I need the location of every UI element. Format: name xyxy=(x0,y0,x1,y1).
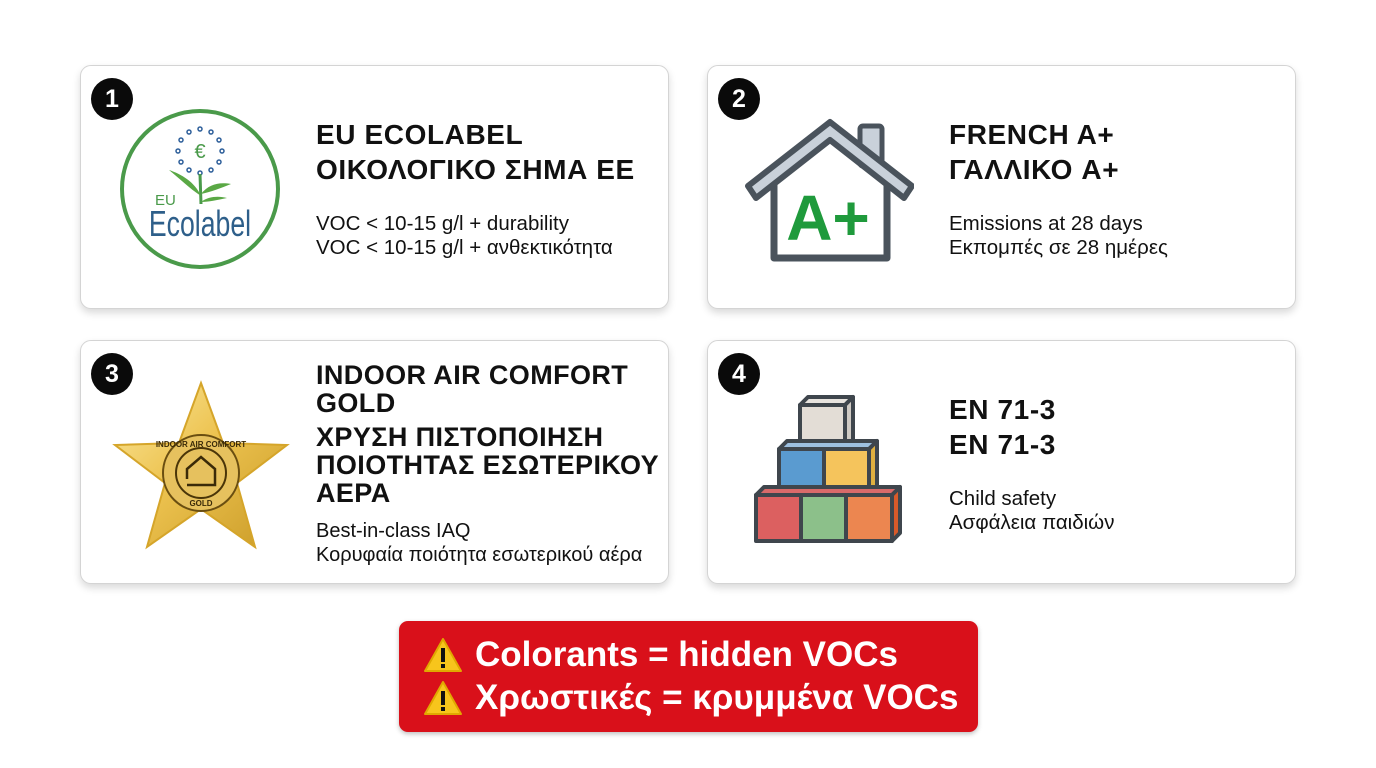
icon: warning xyxy=(424,638,462,672)
badge 4: 4 xyxy=(732,360,746,388)
panel: French A+ xyxy=(707,65,1296,309)
title: ΟΙΚΟΛΟΓΙΚΟ ΣΗΜΑ ΕΕ xyxy=(316,154,635,185)
body text: Ασφάλεια παιδιών xyxy=(949,511,1114,534)
badge 1 xyxy=(91,78,133,120)
body text xyxy=(316,520,642,566)
icon: EU Ecolabel logo: Ecolabel xyxy=(149,203,251,244)
body text: Κορυφαία ποιότητα εσωτερικού αέρα xyxy=(316,544,642,566)
body text xyxy=(316,212,613,259)
callout: colorants warning xyxy=(399,621,978,732)
body text: VOC < 10-15 g/l + ανθεκτικότητα xyxy=(316,236,613,259)
title: EU ECOLABEL xyxy=(316,119,523,150)
title: GOLD xyxy=(316,388,396,418)
icon: EU Ecolabel logo: EU xyxy=(155,192,176,209)
warning line 2: Χρωστικές = κρυμμένα VOCs xyxy=(475,678,958,717)
body text: VOC < 10-15 g/l + durability xyxy=(316,212,569,235)
title: ΓΑΛΛΙΚΟ A+ xyxy=(949,154,1119,185)
icon: gold star: INDOOR AIR COMFORT xyxy=(156,440,246,449)
badge 3 xyxy=(91,353,133,395)
title: FRENCH A+ xyxy=(949,119,1114,150)
title xyxy=(949,119,1119,185)
badge 2: 2 xyxy=(732,85,746,113)
body text: Εκπομπές σε 28 ημέρες xyxy=(949,236,1168,259)
icon: EU Ecolabel logo: € xyxy=(194,141,206,163)
title: ΠΟΙΟΤΗΤΑΣ ΕΣΩΤΕΡΙΚΟΥ xyxy=(316,450,659,480)
badge 2 xyxy=(718,78,760,120)
icon: warning xyxy=(424,681,462,715)
panel: EU Ecolabel xyxy=(80,65,669,309)
title: EN 71-3 xyxy=(949,429,1056,460)
badge 4 xyxy=(718,353,760,395)
title: ΑΕΡΑ xyxy=(316,478,391,508)
title: ΧΡΥΣΗ ΠΙΣΤΟΠΟΙΗΣΗ xyxy=(316,422,603,452)
badge 1: 1 xyxy=(105,85,119,113)
title xyxy=(949,394,1056,460)
body text: Emissions at 28 days xyxy=(949,212,1143,235)
warning line 1: Colorants = hidden VOCs xyxy=(475,635,898,674)
panel: EN 71-3 xyxy=(707,340,1296,584)
body text xyxy=(949,487,1114,534)
icon: EU Ecolabel logo xyxy=(120,109,280,269)
badge 3: 3 xyxy=(105,360,119,388)
title: EN 71-3 xyxy=(949,394,1056,425)
icon: house A+ xyxy=(745,118,914,262)
icon: gold star: GOLD xyxy=(189,499,213,508)
title xyxy=(316,119,635,185)
icon: gold star xyxy=(112,380,290,550)
title: INDOOR AIR COMFORT xyxy=(316,360,628,390)
title xyxy=(316,360,659,508)
body text: Best-in-class IAQ xyxy=(316,520,470,542)
body text: Child safety xyxy=(949,487,1056,510)
panel: Indoor Air Comfort Gold xyxy=(80,340,669,584)
icon: house A+: A+ xyxy=(786,182,870,254)
body text xyxy=(949,212,1168,259)
icon: toy blocks xyxy=(754,394,902,544)
